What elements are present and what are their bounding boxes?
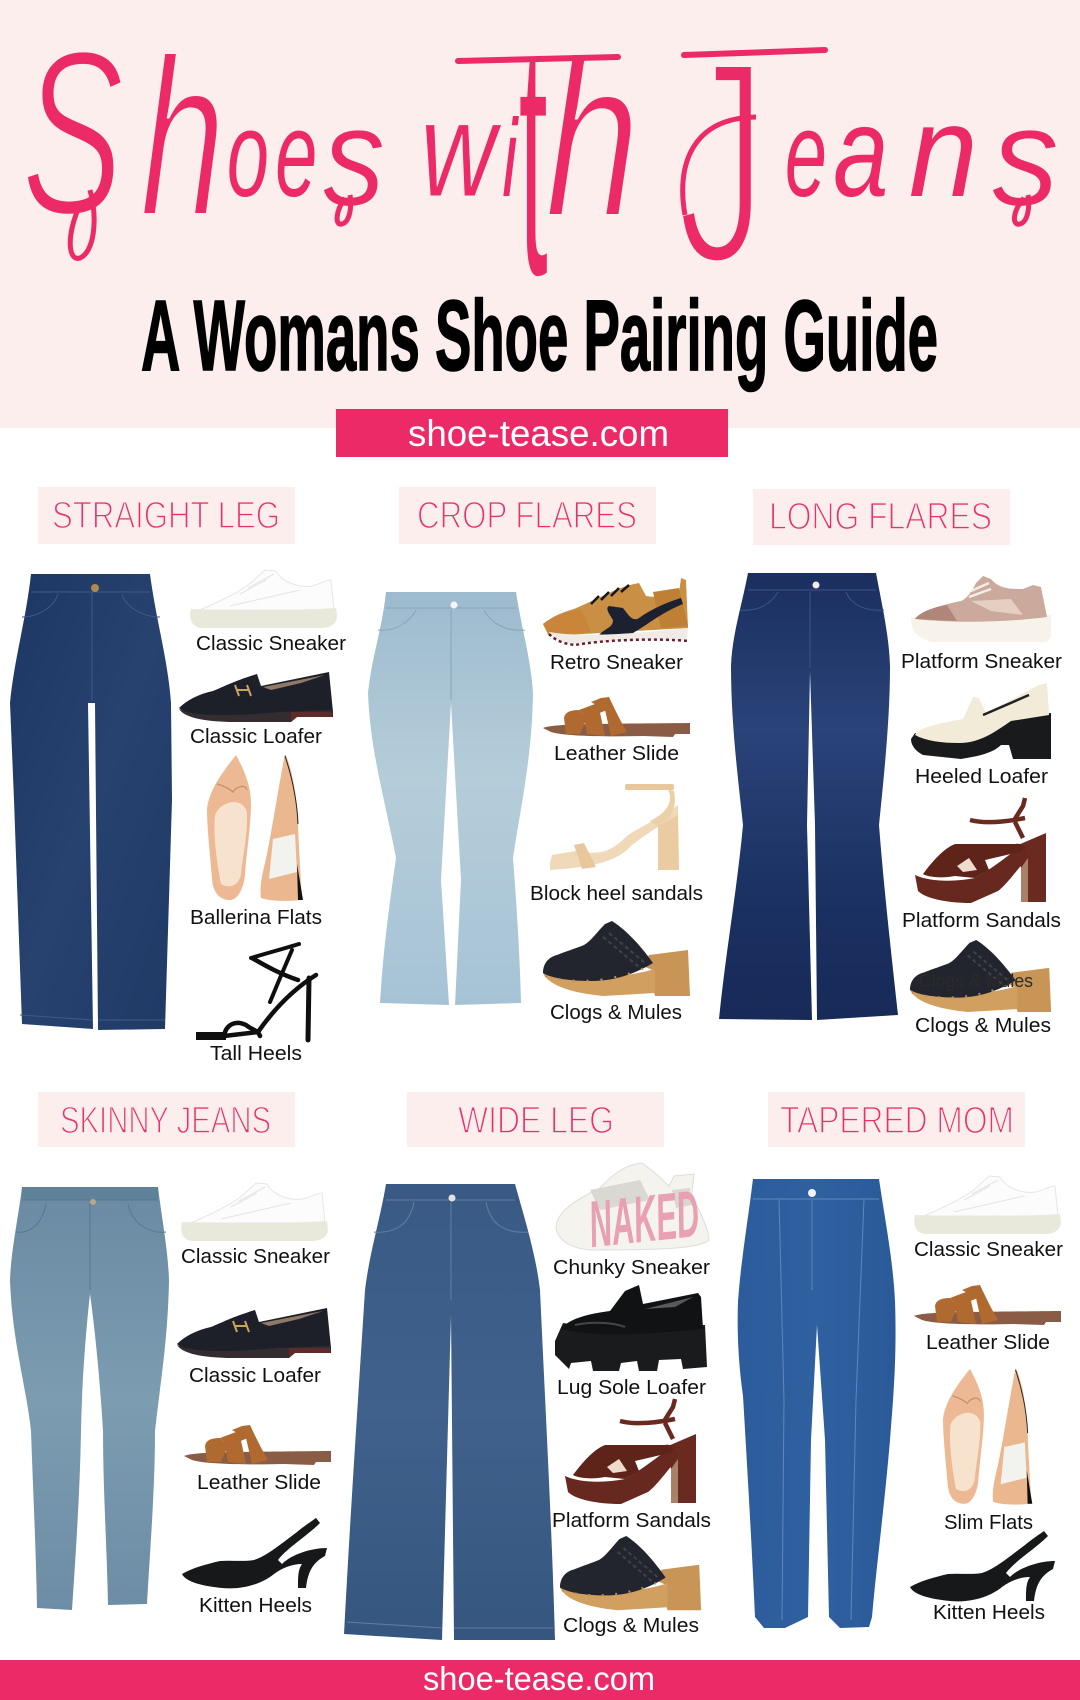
title: Shoes with Jeans: w	[420, 73, 502, 225]
shoe: clogs and mules	[560, 1536, 701, 1637]
footer banner: shoe-tease.com	[423, 1660, 655, 1697]
shoe: leather slide	[914, 1285, 1061, 1354]
shoe: chunky sneaker: Chunky Sneaker	[553, 1256, 710, 1279]
shoe: classic sneaker	[914, 1176, 1063, 1261]
heading: wide leg: WIDE LEG	[458, 1100, 614, 1142]
heading: wide leg	[407, 1092, 664, 1147]
shoe: platform sneaker	[901, 576, 1062, 673]
title: Shoes with Jeans: J	[677, 1, 767, 325]
shoe: kitten heels: Kitten Heels	[199, 1594, 312, 1617]
shoe: heeled loafer	[911, 683, 1051, 788]
shoe: ballerina flats: Ballerina Flats	[190, 906, 322, 929]
panel: tapered mom	[738, 1092, 1063, 1628]
shoe: lug sole loafer: Lug Sole Loafer	[557, 1376, 706, 1399]
shoe: classic loafer: Classic Loafer	[190, 725, 322, 748]
shoe: leather slide	[184, 1425, 331, 1494]
shoe: clogs and mules	[910, 940, 1051, 1037]
heading: tapered mom: TAPERED MOM	[780, 1100, 1014, 1142]
shoe: clogs and mules: Clogs & Mules	[550, 1001, 682, 1024]
jeans: dark long flares	[719, 573, 898, 1020]
shoe: classic sneaker: Classic Sneaker	[181, 1245, 330, 1268]
title: Shoes with Jeans: i	[502, 97, 519, 220]
website banner: shoe-tease.com	[408, 413, 669, 454]
jeans: wide leg	[344, 1184, 555, 1640]
shoe: classic sneaker: Classic Sneaker	[196, 632, 346, 655]
shoe: leather slide	[543, 697, 690, 765]
title: Shoes with Jeans: s	[992, 79, 1059, 235]
shoe: block heel sandals	[530, 784, 703, 905]
title: Shoes with Jeans: a	[833, 81, 888, 224]
website banner	[336, 409, 728, 457]
title: Shoes with Jeans: h	[545, 13, 640, 264]
shoe: tall heels: Tall Heels	[210, 1042, 302, 1065]
title: Shoes with Jeans: o	[227, 85, 269, 222]
shoe: retro sneaker: Retro Sneaker	[550, 651, 683, 674]
heading: crop flares	[399, 487, 656, 544]
title: Shoes with Jeans: e	[785, 85, 827, 222]
shoe: tall heels	[196, 944, 316, 1065]
shoe: retro sneaker	[543, 578, 689, 674]
shoe: platform sandals: Platform Sandals	[552, 1509, 711, 1532]
title: Shoes with Jeans: h	[140, 12, 225, 263]
shoe: clogs and mules: Clogs & Mules	[915, 1014, 1051, 1037]
shoe: kitten heels: Kitten Heels	[933, 1601, 1045, 1624]
jeans: light crop flares	[368, 592, 533, 1005]
shoe: kitten heels	[910, 1531, 1055, 1624]
panel: crop flares	[368, 487, 703, 1024]
title: Shoes with Jeans: e	[275, 85, 317, 222]
shoe: block heel sandals: Block heel sandals	[530, 882, 703, 905]
shoe: classic loafer: Classic Loafer	[189, 1364, 321, 1387]
shoe: ballerina flats	[190, 754, 322, 929]
shoe: slim flats: Slim Flats	[944, 1511, 1033, 1534]
panel: straight leg	[10, 487, 346, 1065]
shoe: slim flats	[943, 1368, 1033, 1534]
panel: skinny jeans	[10, 1092, 331, 1617]
shoe: lug sole loafer	[555, 1285, 707, 1399]
shoe: clogs and mules	[543, 921, 690, 1024]
title: Shoes with Jeans: n	[909, 78, 978, 224]
shoe: leather slide: Leather Slide	[554, 742, 679, 765]
shoe: classic loafer	[177, 1308, 331, 1387]
heading: long flares	[753, 489, 1010, 545]
shoe: classic sneaker: Classic Sneaker	[914, 1238, 1063, 1261]
shoe: platform sneaker: Platform Sneaker	[901, 650, 1062, 673]
heading: skinny jeans	[38, 1092, 295, 1147]
shoe: clogs and mules: Clogs & Mules	[919, 971, 1033, 991]
heading: straight leg: STRAIGHT LEG	[52, 495, 280, 537]
shoe: leather slide: Leather Slide	[926, 1331, 1050, 1354]
jeans: mid-wash skinny	[10, 1187, 169, 1610]
footer banner	[0, 1660, 1080, 1700]
title: Shoes with Jeans	[22, 0, 1059, 347]
panel: wide leg	[344, 1092, 711, 1640]
shoe: classic loafer	[179, 672, 333, 748]
shoe: leather slide: Leather Slide	[197, 1471, 321, 1494]
title: Shoes with Jeans: S	[22, 2, 124, 264]
heading: long flares: LONG FLARES	[769, 496, 992, 538]
shoe: classic sneaker	[190, 570, 346, 655]
heading: tapered mom	[768, 1092, 1025, 1147]
heading: straight leg	[38, 487, 295, 544]
jeans: tapered mom	[738, 1179, 896, 1628]
shoe: kitten heels	[182, 1518, 327, 1617]
shoe: platform sandals	[902, 798, 1061, 932]
heading: skinny jeans: SKINNY JEANS	[60, 1100, 271, 1142]
panel: long flares	[719, 489, 1062, 1037]
shoe: chunky sneaker	[553, 1163, 710, 1279]
title header band	[0, 0, 1080, 428]
shoe: chunky sneaker: NAKED	[585, 1176, 702, 1261]
shoe: heeled loafer: Heeled Loafer	[915, 765, 1048, 788]
shoe: clogs and mules: Clogs & Mules	[563, 1614, 699, 1637]
shoe: classic sneaker	[181, 1183, 330, 1268]
heading: crop flares: CROP FLARES	[417, 495, 637, 537]
shoe: platform sandals	[552, 1399, 711, 1532]
title: Shoes with Jeans: s	[323, 79, 385, 235]
jeans: dark straight leg	[10, 574, 172, 1030]
shoe: platform sandals: Platform Sandals	[902, 909, 1061, 932]
